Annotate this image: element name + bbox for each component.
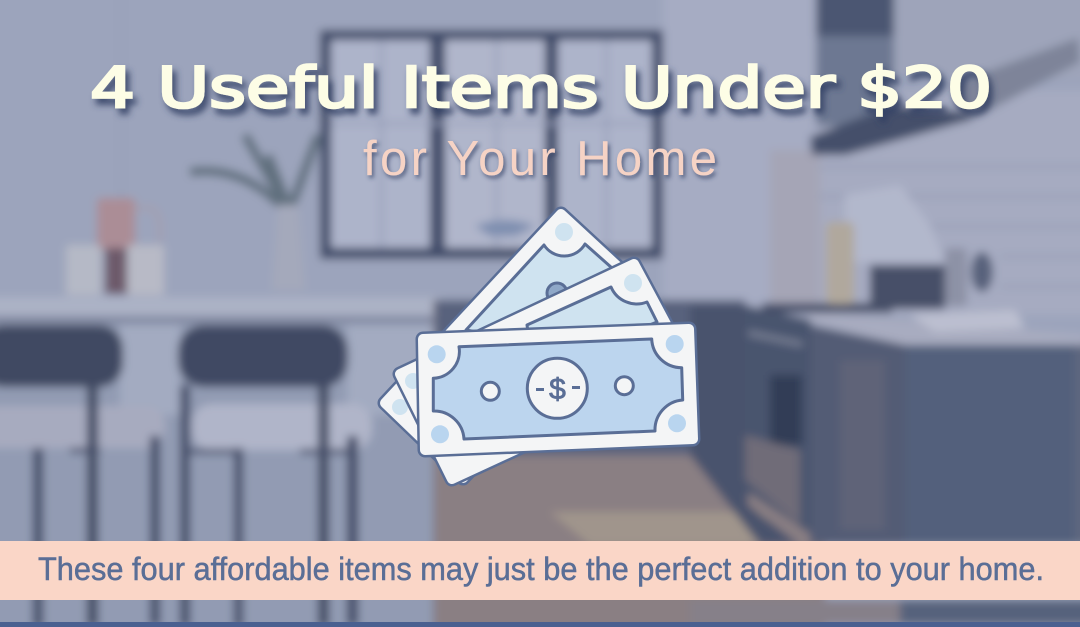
middle bill: [400, 264, 690, 479]
front bill: [423, 329, 693, 450]
bottom banner: [0, 541, 1080, 600]
back bill: [385, 214, 641, 478]
icon: fan of dollar bills: [385, 214, 693, 479]
subtitle: for Your Home: [363, 132, 717, 186]
dollar sign: $: [549, 373, 566, 406]
title: 4 Useful Items Under $20: [90, 56, 992, 121]
banner text: These four affordable items may just be the perfect addition to your home.: [38, 551, 1044, 587]
